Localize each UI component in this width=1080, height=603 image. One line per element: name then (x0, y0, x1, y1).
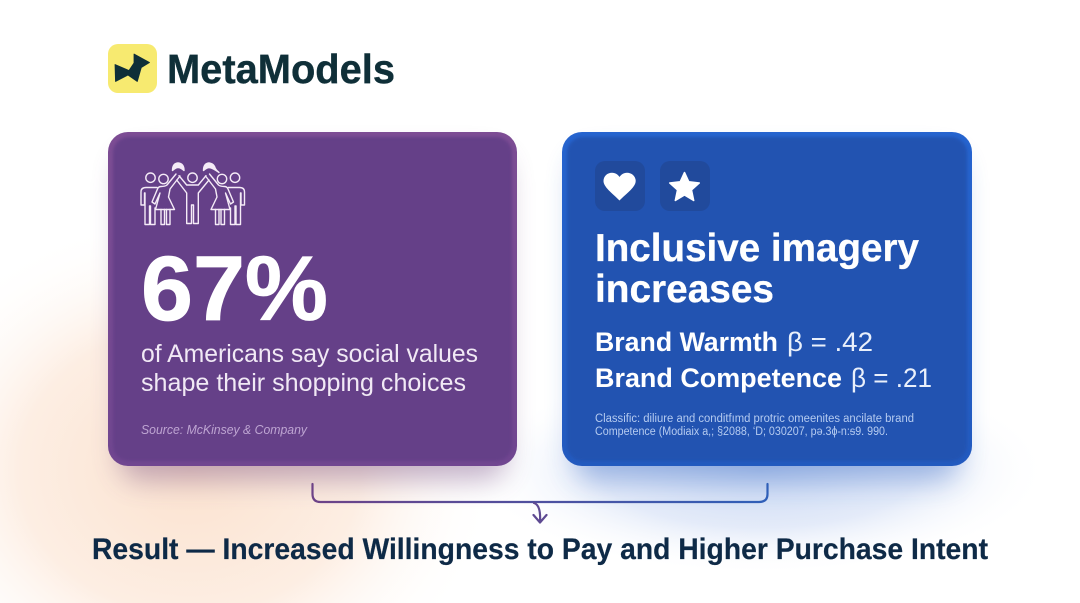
big number: 67% (141, 238, 328, 340)
metric: brand warmth (595, 327, 873, 357)
fine print: Competence (Modiaix a,; §2088, ‘D; 030207, pə.3ɸ-n:ᵴ9. 990. (595, 426, 888, 438)
fine print (595, 413, 914, 438)
description (141, 340, 478, 397)
right man and woman (206, 173, 244, 224)
left man and woman (141, 173, 180, 224)
panel: 67% statistic (108, 132, 517, 480)
icon: heart badge (595, 161, 645, 211)
result statement: Result — Increased Willingness to Pay and Higher Purchase Intent (92, 533, 988, 566)
icon: star badge (660, 161, 710, 211)
centre man (177, 173, 209, 224)
logo (108, 44, 395, 93)
panel: inclusive imagery (562, 132, 972, 480)
icon: logo mark (108, 44, 157, 93)
metric: brand warmth: Brand Warmth (595, 327, 778, 357)
heading: increases (595, 268, 774, 311)
hair (172, 163, 184, 170)
fine print: Classific: diliure and conditfımd protric omeenites ancilate brand (595, 413, 914, 425)
connector bracket with arrow (312, 484, 768, 522)
heading (595, 227, 919, 311)
metric: brand warmth: β = .42 (787, 327, 873, 357)
icon: group of people raising hands (141, 163, 244, 224)
brand name: MetaModels (167, 46, 395, 92)
metric: brand competence: Brand Competence (595, 363, 842, 393)
description: shape their shopping choices (141, 369, 466, 397)
source: Source: McKinsey & Company (141, 423, 308, 437)
description: of Americans say social values (141, 340, 478, 368)
metric: brand competence: β = .21 (851, 363, 932, 393)
heading: Inclusive imagery (595, 227, 919, 270)
